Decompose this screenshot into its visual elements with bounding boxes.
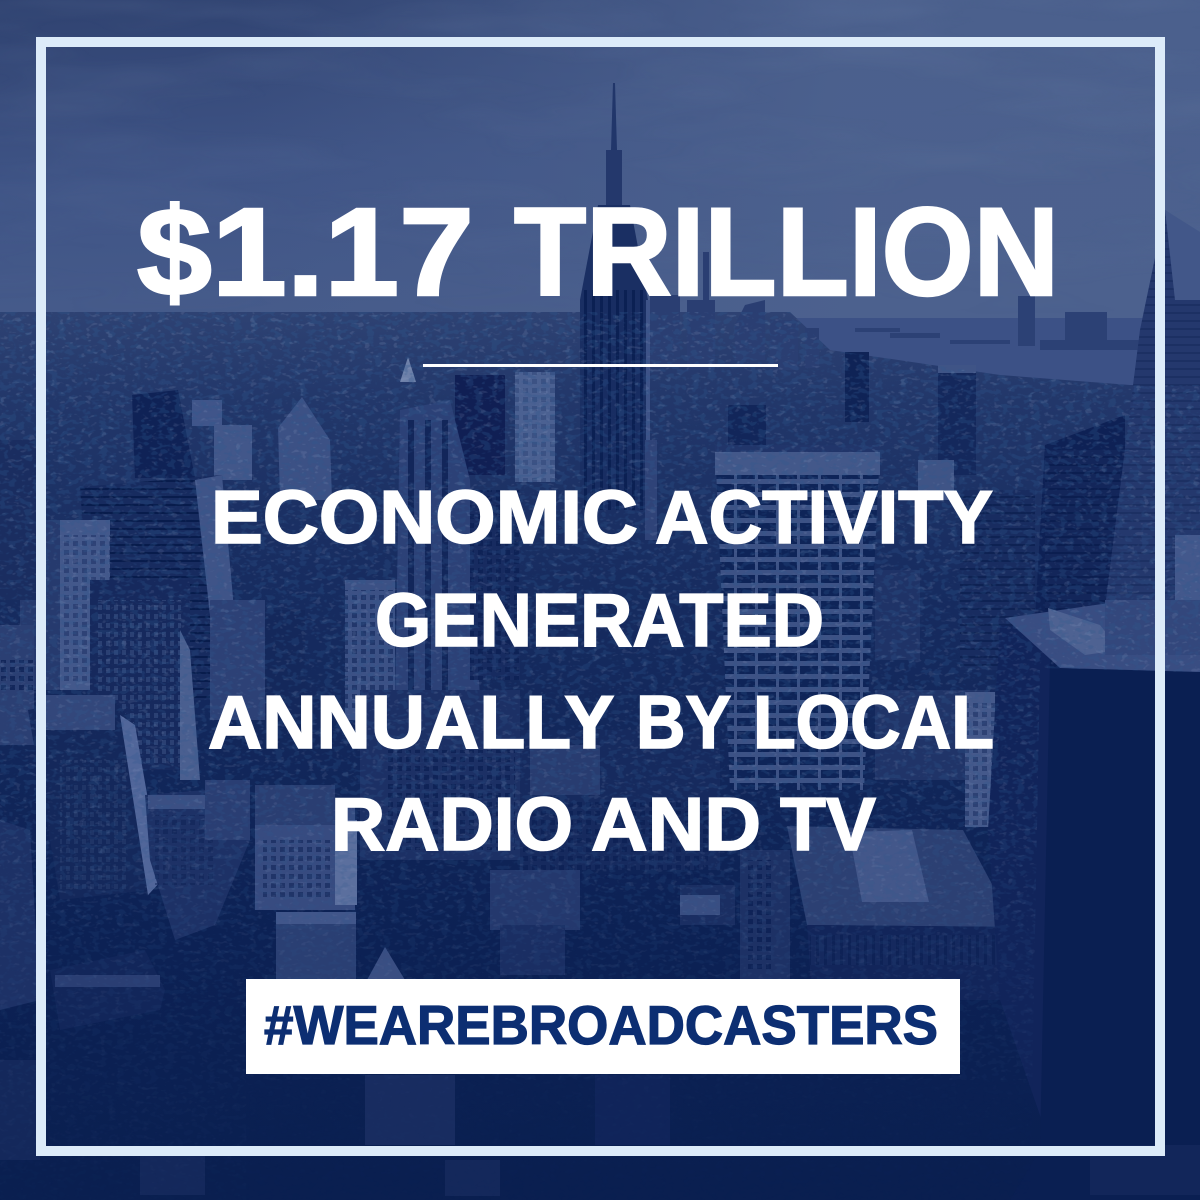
dark foreground tower	[988, 600, 1200, 1200]
line 3: BY	[636, 680, 730, 764]
rooftop building lower right	[787, 690, 1015, 1000]
gothic tower blocks lower left	[0, 580, 395, 780]
skyscrapers behind the text	[132, 352, 976, 700]
line 2: GENERATED	[375, 578, 824, 662]
line 4: TV	[780, 782, 876, 866]
headline: $1.17 trillion: $1.17	[137, 183, 474, 322]
low blocks centre	[360, 690, 790, 980]
white window block centre right	[715, 445, 880, 790]
line 4: AND	[591, 782, 761, 866]
far shore and islands	[855, 296, 1140, 350]
sky	[0, 0, 1200, 400]
sky brightening to the right	[0, 0, 1200, 400]
hashtag text: #WEAREBROADCASTERS	[264, 994, 938, 1056]
lower Manhattan skyline	[650, 252, 819, 370]
glass tower at right edge	[1106, 210, 1200, 610]
clouds	[121, 4, 134, 6]
photo grain overlay	[0, 312, 1200, 1078]
wide office block left	[0, 440, 235, 700]
line 1: ECONOMIC	[211, 475, 638, 559]
stepped buildings middle left	[28, 695, 405, 980]
description text	[208, 475, 994, 866]
line 3: LOCAL	[753, 680, 994, 764]
headline: $1.17 trillion: TRILLION	[514, 183, 1059, 322]
hashtag label	[246, 979, 960, 1074]
Empire State Building	[580, 83, 657, 540]
towers right of centre	[875, 415, 1125, 670]
ground city mass	[0, 312, 1200, 1200]
harbor water	[780, 318, 1200, 393]
line 4: RADIO	[331, 782, 573, 866]
divider line	[423, 364, 778, 367]
line 1: ACTIVITY	[655, 475, 993, 559]
line 3: ANNUALLY	[208, 680, 613, 764]
hashtag box	[246, 979, 960, 1074]
lower left dim structures	[0, 820, 1200, 1196]
